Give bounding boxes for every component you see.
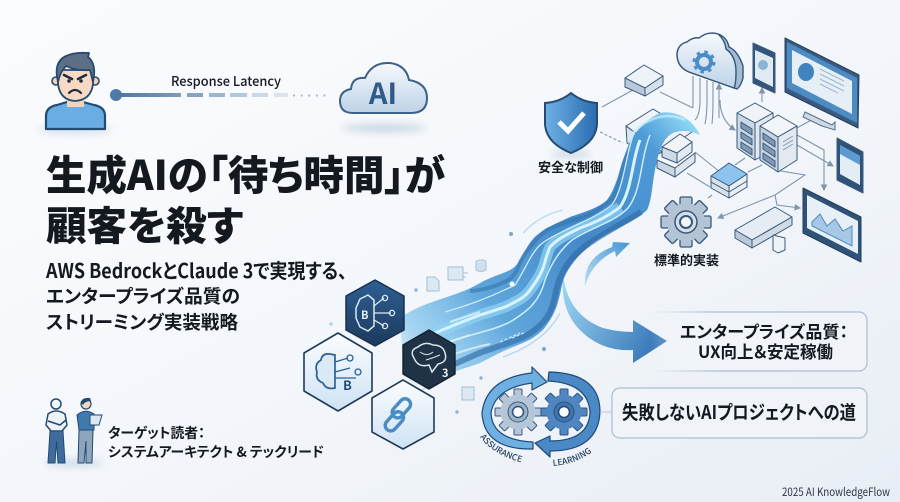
icon: chart tablet	[803, 188, 861, 262]
icon: security shield	[545, 93, 597, 157]
icon: small appliance	[625, 65, 663, 96]
connector lines	[600, 76, 833, 218]
subtitle	[45, 255, 347, 335]
icon: assurance and learning gear loop	[480, 366, 601, 466]
icon: standard implementation gear	[661, 197, 711, 247]
hexagon: brain B: B	[343, 375, 352, 394]
hexagon: chain link	[372, 380, 434, 449]
data stream ribbon	[400, 112, 700, 392]
hexagon: bedrock dark: B	[361, 307, 369, 323]
icon: server stack behind stream	[626, 109, 695, 177]
subtitle: エンタープライズ品質の	[46, 283, 240, 309]
callout: enterprise quality	[650, 312, 867, 371]
label: safe control: 安全な制御	[538, 157, 603, 176]
hexagon: bedrock dark	[346, 280, 404, 346]
icon: small storage box	[711, 163, 747, 198]
icon: assurance and learning gear loop: LEARNING	[553, 448, 591, 466]
target reader text	[108, 423, 324, 462]
small curved arrow	[585, 242, 630, 286]
floating data icons	[329, 232, 546, 414]
icon: phone	[753, 43, 775, 93]
icon: AI cloud: AI	[368, 71, 397, 113]
icon: tablet	[837, 138, 863, 193]
label: standard implementation: 標準的実装	[654, 250, 719, 269]
big curved arrow	[563, 275, 667, 363]
target reader text: システムアーキテクト & テックリード	[108, 442, 324, 462]
icon: target readers	[44, 398, 104, 466]
subtitle: AWS BedrockとClaude 3で実現する、	[45, 255, 347, 284]
hexagon: Claude 3	[403, 330, 455, 389]
subtitle: ストリーミング実装戦略	[46, 309, 238, 335]
label: response latency: Response Latency	[171, 70, 282, 90]
icon: AI cloud	[340, 63, 427, 132]
latency connector	[110, 89, 331, 101]
callout: path to success	[600, 388, 867, 438]
hexagon: brain B	[304, 333, 372, 411]
icon: frustrated user	[37, 53, 113, 134]
icon: server rack	[737, 103, 797, 172]
icon: cloud gear	[677, 33, 743, 89]
callout: enterprise quality: エンタープライズ品質：	[680, 318, 848, 343]
icon: connector device	[735, 207, 792, 253]
icon: assurance and learning gear loop: ASSURANCE	[480, 434, 522, 462]
callout: enterprise quality: UX向上＆安定稼働	[698, 338, 833, 363]
icon: monitor	[785, 38, 859, 130]
title: 顧客を殺す	[46, 194, 243, 252]
callout: path to success: 失敗しないAIプロジェクトへの道	[622, 398, 856, 425]
target reader text: ターゲット読者：	[108, 423, 205, 443]
hexagon: Claude 3: 3	[442, 365, 448, 381]
title	[46, 142, 445, 252]
title: 生成AIの「待ち時間」が	[46, 142, 445, 202]
